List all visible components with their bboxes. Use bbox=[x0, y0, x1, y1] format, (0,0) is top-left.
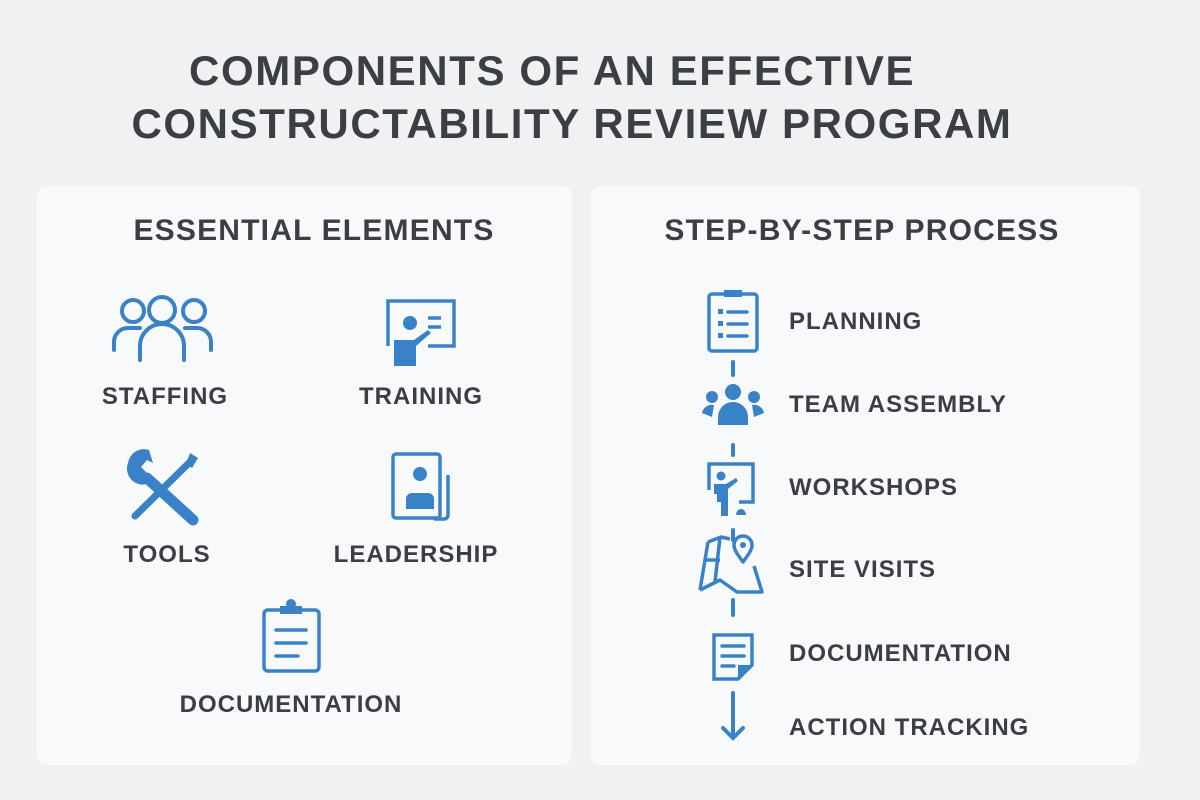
connector line bbox=[720, 360, 746, 741]
label: documentation: DOCUMENTATION bbox=[180, 691, 402, 718]
panel: step-by-step process bbox=[591, 186, 1140, 765]
title: COMPONENTS OF AN EFFECTIVE bbox=[189, 47, 915, 94]
label: action tracking: ACTION TRACKING bbox=[789, 714, 1029, 741]
icon: leadership bbox=[391, 452, 450, 521]
icon: site visits bbox=[698, 534, 764, 594]
label: tools: TOOLS bbox=[123, 541, 211, 568]
heading: essential elements: ESSENTIAL ELEMENTS bbox=[133, 214, 495, 247]
icon: documentation step bbox=[712, 633, 754, 681]
label: staffing: STAFFING bbox=[102, 383, 228, 410]
icon: team assembly bbox=[702, 384, 764, 425]
panel: essential elements bbox=[37, 186, 572, 765]
icon: training bbox=[386, 299, 456, 366]
icon: planning bbox=[707, 290, 759, 353]
icon: tools bbox=[126, 449, 198, 526]
title: CONSTRUCTABILITY REVIEW PROGRAM bbox=[131, 100, 1013, 147]
label: leadership: LEADERSHIP bbox=[334, 541, 498, 568]
label: workshops: WORKSHOPS bbox=[789, 474, 958, 501]
title bbox=[131, 47, 1013, 147]
label: site visits: SITE VISITS bbox=[789, 556, 936, 583]
icon: workshops bbox=[707, 462, 755, 516]
label: planning: PLANNING bbox=[789, 308, 922, 335]
icon: documentation bbox=[262, 599, 321, 673]
heading: step-by-step process: STEP-BY-STEP PROCESS bbox=[664, 214, 1060, 247]
label: team assembly: TEAM ASSEMBLY bbox=[789, 391, 1007, 418]
icon: staffing bbox=[112, 295, 213, 362]
label: training: TRAINING bbox=[359, 383, 483, 410]
label: documentation step: DOCUMENTATION bbox=[789, 640, 1012, 667]
